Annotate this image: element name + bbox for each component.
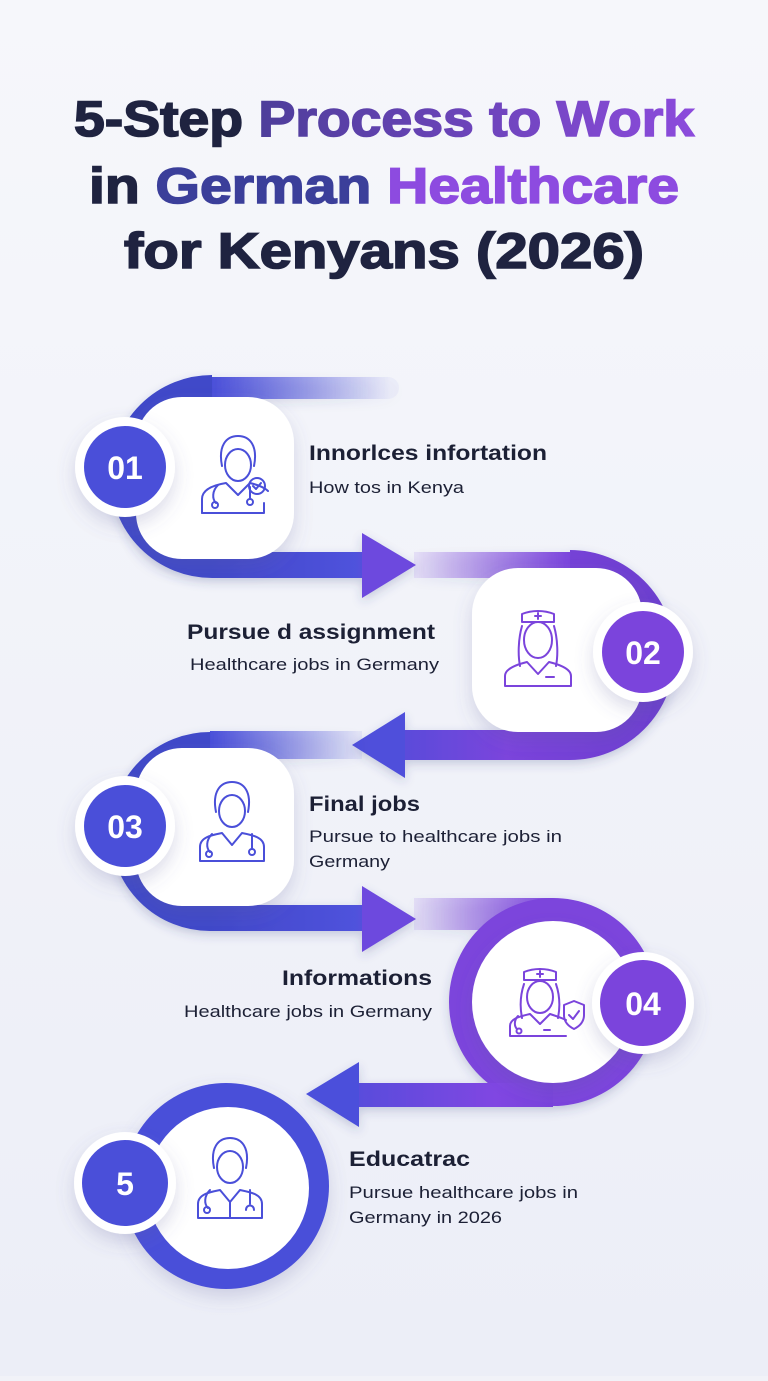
step 2 track and arrow [352, 565, 660, 778]
step 5 panel: Pursue healthcare jobs in [349, 1183, 578, 1202]
step 1 number [75, 417, 175, 517]
step 5 panel: Germany in 2026 [349, 1208, 502, 1227]
step 2 panel [187, 568, 693, 732]
step 5 number [74, 1132, 176, 1234]
step 1 panel: How tos in Kenya [309, 478, 465, 497]
icon: doctor [200, 782, 264, 861]
step 2 number [593, 602, 693, 702]
icon: nurse [505, 611, 571, 686]
icon: nurse with shield [510, 969, 584, 1036]
icon: doctor with check [202, 436, 268, 513]
step 4 number [592, 952, 694, 1054]
step 4 panel: 04 [625, 986, 661, 1022]
step 3 panel [75, 748, 562, 906]
title: in German Healthcare [89, 158, 679, 214]
step 4 panel: Healthcare jobs in Germany [184, 1002, 433, 1021]
step 3 panel: Pursue to healthcare jobs in [309, 827, 562, 846]
step 3 text: Final jobs [309, 793, 420, 816]
step 5 panel: 5 [116, 1166, 134, 1202]
step 4 panel [184, 921, 694, 1083]
title: for Kenyans (2026) [124, 223, 644, 279]
step 3 panel: 03 [107, 809, 143, 845]
step 1 panel [75, 397, 547, 559]
step 1 track and arrow [123, 388, 416, 598]
step 2 panel: Healthcare jobs in Germany [190, 655, 440, 674]
step 2 panel: 02 [625, 635, 661, 671]
step 5 panel [74, 1083, 578, 1289]
step 3 track and arrow [123, 745, 416, 952]
icon: doctor [198, 1138, 262, 1218]
step 5 ring card [123, 1083, 329, 1289]
step 1 card [136, 397, 294, 559]
step 3 panel: Germany [309, 852, 391, 871]
step 1 panel: 01 [107, 450, 143, 486]
title: 5-Step Process to Work [74, 91, 694, 147]
step 4 text: Informations [282, 967, 432, 990]
step 5 text: Educatrac [349, 1148, 470, 1171]
step 4 track and arrow [306, 910, 645, 1127]
step 3 number [75, 776, 175, 876]
step 2 text: Pursue d assignment [187, 621, 435, 644]
step 2 card [472, 568, 642, 732]
step 1 text: Innorlces infortation [309, 442, 547, 465]
title [74, 91, 694, 279]
step 3 card [136, 748, 294, 906]
step 4 card [472, 921, 634, 1083]
